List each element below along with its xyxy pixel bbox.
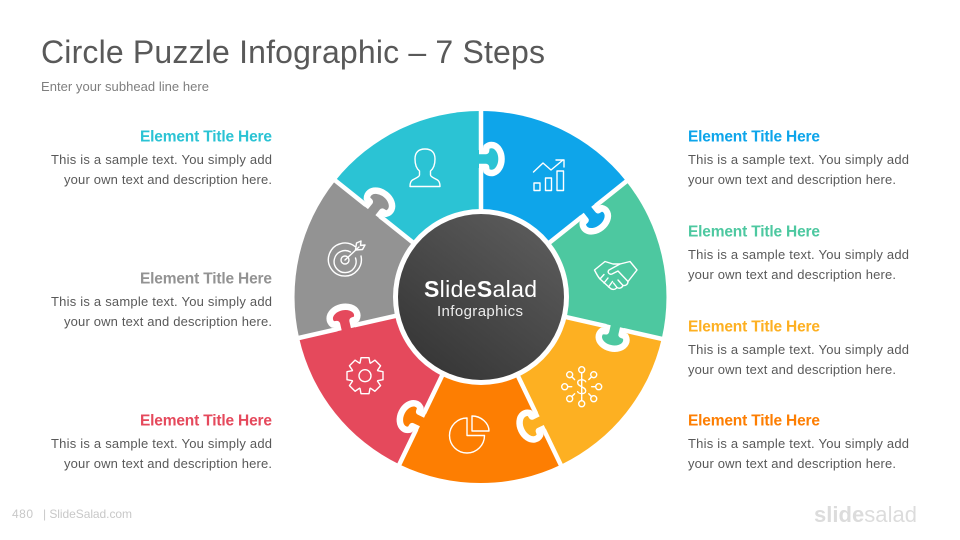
text block: left 2: This is a sample text. You simply add	[51, 294, 272, 309]
piece: yellow	[480, 297, 662, 465]
tab: blue into green	[546, 176, 644, 260]
piece: red	[299, 297, 480, 465]
title: Circle Puzzle Infographic – 7 Steps	[41, 34, 545, 70]
icon: dollar network	[562, 367, 602, 407]
text block: right 3: This is a sample text. You simply add	[688, 342, 909, 357]
text block: right 1: your own text and description here.	[688, 172, 896, 187]
text block: right 1	[688, 128, 909, 187]
text block: right 3	[688, 318, 909, 377]
piece: orange	[400, 297, 561, 483]
tab: green into yellow	[559, 314, 668, 360]
piece: gray	[295, 181, 480, 338]
text block: right 3: Element Title Here	[688, 318, 820, 336]
text block: right 1: Element Title Here	[688, 128, 820, 146]
footer: logo: slidesalad	[814, 502, 917, 527]
text block: left 3	[51, 412, 272, 471]
icon: gear	[347, 358, 383, 394]
icon: person	[410, 149, 440, 186]
text block: left 2	[51, 270, 272, 329]
text block: right 2	[688, 224, 909, 282]
text block: left 2: your own text and description here.	[64, 314, 272, 329]
tab: gray into teal	[329, 161, 427, 245]
hub subtitle: Infographics	[437, 303, 523, 320]
tab: red into gray	[289, 295, 398, 341]
text block: right 2: This is a sample text. You simply add	[688, 247, 909, 262]
text block: left 3: Element Title Here	[140, 412, 272, 430]
tab: orange into red	[378, 364, 445, 471]
footer: site name: | SlideSalad.com	[43, 507, 132, 521]
text block: left 2: Element Title Here	[140, 270, 272, 288]
tab: teal into blue	[479, 105, 502, 212]
text block: right 4: This is a sample text. You simply add	[688, 436, 909, 451]
text block: left 1: Element Title Here	[140, 128, 272, 146]
icon: growth chart	[534, 160, 564, 190]
icon: handshake	[594, 262, 637, 289]
text block: right 4: Element Title Here	[688, 412, 820, 430]
icon: target	[328, 241, 365, 276]
piece: blue	[480, 111, 626, 297]
text block: left 3: your own text and description here.	[64, 456, 272, 471]
subhead: Enter your subhead line here	[41, 79, 209, 94]
text block: left 1	[51, 128, 272, 187]
text block: right 3: your own text and description here.	[688, 362, 896, 377]
text block: right 2: your own text and description here.	[688, 267, 896, 282]
tab: yellow into orange	[498, 373, 565, 479]
text block: right 4	[688, 412, 909, 471]
text block: right 1: This is a sample text. You simply add	[688, 152, 909, 167]
text block: left 1: your own text and description here.	[64, 172, 272, 187]
text block: left 3: This is a sample text. You simply add	[51, 436, 272, 451]
hub brand text: SlideSalad	[424, 276, 537, 302]
piece: teal	[335, 111, 480, 297]
piece: green	[480, 181, 666, 338]
text block: right 2: Element Title Here	[688, 224, 820, 240]
text block: right 4: your own text and description here.	[688, 456, 896, 471]
center hub	[393, 209, 569, 385]
footer: page number: 480	[12, 507, 33, 521]
text block: left 1: This is a sample text. You simply add	[51, 152, 272, 167]
puzzle circle diagram	[289, 105, 668, 483]
icon: pie chart	[450, 416, 489, 453]
